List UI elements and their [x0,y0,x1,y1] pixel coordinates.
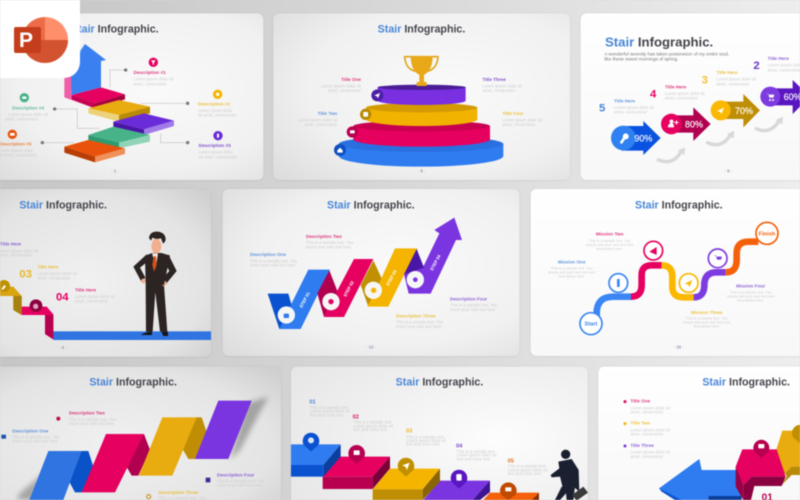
text: description 5: Description #5 [0,142,32,147]
pin 5 [500,482,517,500]
shirt [152,253,158,267]
left arm [133,254,148,282]
step labels: STEP 03 [385,269,398,287]
text: description four: Description Four [450,297,487,302]
icon circle purple [708,249,727,268]
hands [141,279,167,286]
text: mission two: This is a sample text. You [589,239,630,243]
text: item 5: Title Here [614,98,636,103]
text: description 3: Description #3 [199,143,231,148]
finish marker [756,222,778,244]
text: title one: amet, consectetur [630,410,664,415]
yellow block [776,431,800,485]
path orange [726,242,758,272]
arrow 90 [611,121,661,155]
text: item 2 [768,56,800,72]
text: description one: Description One [12,429,49,434]
pink block [736,449,786,500]
bullet one [623,400,626,403]
start marker [580,313,602,335]
text: title two: Lorem ipsum dolor sit [630,427,671,432]
text: step 03: This is a sample text. [406,434,445,439]
icon pink [149,58,158,67]
heading: Stair Infographic. [378,23,465,35]
panel: zigzag band [0,367,281,500]
text: mission two [586,232,633,251]
text: item 4: Lorem ipsum dolor sit [665,91,706,96]
text: step 01: text and more text. [310,412,344,417]
text: title three: Title Three [482,77,506,82]
icon green [20,93,29,102]
step purple [113,113,174,135]
text: description 4: amet, consectetur [5,117,39,122]
start marker: Start [585,322,598,328]
step labels: STEP 02 [342,280,355,298]
text: mission four: description here. [737,298,764,302]
text: description three: insert your own text here [396,324,442,329]
text: item 5: amet, consectetur [614,110,648,115]
heading: Stair Infographic. [702,376,790,388]
text: description 3 [199,143,238,159]
heading: Stair Infographic. [19,199,107,211]
text: title two: amet, consectetur [630,432,664,437]
icon circle pink [644,241,663,260]
text: description four: Description Four [217,472,254,477]
page number: ‹ 5 › [418,169,426,174]
text: mission three: simply add your own text and [683,321,730,325]
text: step 02 [353,414,394,432]
path blue [597,297,631,318]
tier blue [339,136,503,167]
right arm [161,254,177,284]
ribbon step 3 [361,248,417,307]
text: title three: Lorem ipsum dolor sit [630,450,671,455]
text: description one: insert your own text here [250,263,296,268]
text: description 2 [198,101,237,118]
text: item 2: amet, consectetur [768,67,800,72]
step labels: STEP 01 [298,291,311,309]
panel: stair steps with arrow [0,13,263,180]
powerpoint logo card [0,0,80,78]
text: step 05: This is a sample text. [508,464,547,469]
text: description three [159,490,206,500]
text: description one [250,252,298,268]
text: step 03: text and more text. [406,442,440,447]
text: item 4: Title Here [665,84,687,89]
text: description 1: Lorem ipsum dolor sit [134,77,174,82]
text: title three: Lorem ipsum dolor sit [482,84,523,89]
text: description four: This is a sample text. You [450,303,498,308]
text: description one [12,429,60,444]
pin 4 [451,470,467,489]
icon orange [8,130,17,139]
blue arrow [659,459,742,500]
pin 2 [348,445,365,464]
heading: Stair Infographic. [396,376,483,388]
text: title four: amet, consectetur [502,122,536,127]
text: mission four: Mission Four [736,283,765,288]
text: description two: Description Two [306,234,342,239]
page number: ‹ 16 › [674,345,684,350]
text: mission one: simply add your own text and [548,271,595,275]
text: step 02: 02 [353,414,359,420]
icon purple [213,131,223,140]
character: businessman [133,232,177,336]
text: mission one: Mission One [558,259,586,264]
text: title four: Lorem ipsum dolor sit [502,118,543,123]
text: title two [298,111,338,127]
text: item 3: amet, consectetur [716,81,750,86]
text: mission four: This is a sample text. You [730,290,771,294]
text: description two: insert your own text here [306,244,352,249]
page number: ‹ 9 › [724,169,733,174]
text: description two [306,234,354,249]
band purple [195,401,252,459]
number 3: 3 [702,74,708,86]
ribbon step 4 arrow [404,218,462,294]
number 5: 5 [599,103,605,115]
text: mission three: This is a sample text. You [686,317,727,321]
step 3 yellow [373,469,440,500]
body [551,459,579,492]
text: step 04: Lorem ipsum dolor sit [457,453,497,458]
text: step 02: This is a sample text. [353,420,392,425]
text: item 3: Lorem ipsum dolor sit [716,77,757,82]
text: step 05: 05 [508,458,514,464]
text: description two: Description Two [69,411,105,416]
badge pink [30,299,42,312]
arrow up [65,44,106,95]
arrow 80 [661,107,711,141]
text: title one [630,399,671,415]
text: step 04 [456,444,497,461]
text: step 01 [309,400,351,417]
text: step 05: text and more text. [508,471,542,476]
text: mission three: description here. [693,325,720,329]
text: description 5 [0,142,38,158]
icon: trophy [405,56,438,86]
text: item 5 [614,98,655,115]
heading: Stair Infographic. [89,376,177,388]
band shadow left [17,473,43,500]
text: step 05: Lorem ipsum dolor sit [508,467,548,472]
ribbon pink [22,307,53,339]
head [151,239,161,253]
legs [146,285,167,332]
number 04: 04 [56,292,69,304]
connector lines [42,70,188,143]
text: item 2: Title Here [768,56,789,61]
text: mission two: Mission Two [596,232,624,237]
path pink [631,265,662,297]
text: step 05 [508,458,548,476]
text: title one: Lorem ipsum dolor sit [630,405,671,410]
badge purple [371,89,383,101]
text: mission one [548,259,595,279]
ribbon step 1 [268,270,330,329]
text: step 03: Lorem ipsum dolor sit [406,438,447,443]
text: mission three: Mission Three [691,310,723,315]
text: item 4: Lorem ipsum dolor sit [75,294,116,299]
text: description one: Description One [250,252,286,257]
hair [149,232,166,244]
step yellow [88,100,150,122]
text: description three: Description Three [396,314,436,319]
number 03: 03 [19,268,32,280]
badge blue [334,144,346,156]
text: description four [217,472,265,488]
text: description two: This is a sample text. You [69,417,117,422]
text: mission four [727,283,774,302]
band shadow right [230,397,268,460]
badge red [347,126,358,138]
text: item 4 [665,84,706,101]
band yellow [139,417,207,476]
text: title one [321,77,362,93]
step pink [72,87,125,108]
text: mission three [683,310,730,329]
text: step 01: Lorem ipsum dolor sit [310,409,351,414]
tie [152,256,157,272]
path purple [694,272,726,297]
text: title three: amet, consectetur [630,454,664,459]
text: step 02: Lorem ipsum dolor sit [353,423,394,428]
text: mission two: simply add your own text and [586,243,633,247]
band blue [29,451,93,500]
step green [88,127,150,148]
step orange [64,140,125,162]
page number: ‹ 1 › [111,169,119,174]
text: item 4: Title Here [75,287,97,292]
text: title three: amet, consectetur [482,88,516,93]
path yellow [662,265,694,297]
text: step 02: text and more text. [353,427,388,432]
text: item 2 [0,242,39,258]
text: step 03 [406,429,447,447]
text: title four [502,111,543,127]
text: description four: This is a sample text. You [217,478,265,483]
text: title two: amet, consectetur [304,122,338,127]
text: description three [396,314,444,329]
text: title four: Title Four [502,111,524,116]
text: description four: insert your own text here [217,483,263,488]
text: title two: Title Two [318,111,337,116]
legs [555,487,575,500]
head [561,450,570,459]
text: step 01: 01 [309,400,316,406]
badge yellow [0,280,10,292]
icon two [56,417,60,421]
step labels: STEP 04 [429,253,442,271]
text: description 1: Description #1 [134,70,166,75]
text: title one: Lorem ipsum dolor sit [321,84,362,89]
panel: stairs with businessman [0,189,211,357]
step icons [284,277,418,318]
curved arrows [657,120,780,162]
badge yellow [360,109,371,120]
text: item 3: Title Here [37,264,59,269]
heading: Stair Infographic. [71,23,159,35]
text: title one: amet, consectetur [328,88,362,93]
blue floor [53,331,211,340]
band pink [82,434,150,492]
text: title three [630,443,671,459]
subtitle [604,52,729,62]
text: description 2: Description #2 [198,101,230,106]
step 2 pink [323,457,390,489]
text: description 3: Lorem ipsum dolor [199,150,234,155]
subtitle: like these sweet mornings of spring. [604,57,678,62]
text: description 4 [5,105,49,122]
text: title one: Title One [341,77,361,82]
text: item 3: Title Here [716,70,738,75]
curved arrow heads [678,117,783,155]
tier purple [378,85,466,105]
shoes [141,331,168,336]
arrow 60 [760,80,800,114]
bullet two [623,422,626,425]
text: step 03: 03 [406,429,412,435]
text: item 3 [37,264,78,280]
arrow 90: 90% [634,133,652,143]
connector dots [41,68,189,144]
panel: arrows with percentages [581,13,800,180]
text: mission two: description here. [596,247,623,251]
text: item 3 [716,70,757,86]
text: description four [450,297,498,312]
text: description two: insert your own text here [69,421,115,426]
text: title two: Title Two [630,421,650,426]
step 1 blue [291,444,341,477]
text: step 04: This is a sample text. [457,449,496,454]
text: item 4 [75,287,116,303]
panel: winding path start to finish [531,189,800,356]
icon four [206,478,210,482]
pin yellow [792,425,800,443]
heading: Stair Infographic. [605,34,713,49]
text: item 3: Lorem ipsum dolor sit [37,271,78,276]
arrow 80: 80% [685,119,703,129]
icon three [147,495,151,499]
page number: ‹ 13 › [366,345,377,350]
text: description one: This is a sample text. You [12,435,60,440]
heading: Stair Infographic. [327,199,415,211]
text: description 2: sit amet, consectetur [198,113,237,118]
text: step 04: text and more text. [457,456,491,461]
text: mission one: description here. [558,275,585,279]
number 2: 2 [753,60,760,72]
text: mission one: This is a sample text. You [551,267,592,271]
panel: 3d steps with pins [291,367,588,500]
panel: ribbon steps [223,189,519,356]
text: item 2: Title Here [0,242,22,247]
text: description 3: sit amet, consectetur [199,154,238,159]
powerpoint icon: P [19,29,33,52]
text: description 4: Description #4 [12,105,44,110]
arrow 70 [711,94,760,127]
pin 3 [398,458,414,477]
panel: arrow with blocks [598,367,800,500]
text: step 04: 04 [456,444,463,450]
ribbon step 2 [317,259,373,317]
number 4: 4 [650,89,657,101]
text: description 2: Lorem ipsum dolor [198,108,233,113]
subtitle: A wonderful serenity has taken possession of my entire soul, [604,52,729,57]
text: description four: insert your own text here [450,307,496,312]
arrow 70: 70% [735,106,753,116]
text: item 3: amet, consectetur [37,275,71,280]
text: title three: Title Three [630,443,654,448]
page number: ‹ 4 › [59,345,67,350]
pin pink [753,440,769,458]
text: description 4: Lorem ipsum dolor sit [8,112,49,117]
text: description one: insert your own text here [12,439,59,444]
bullet three [623,444,626,447]
icon circle yellow [679,274,698,292]
icon circle blue [609,274,628,292]
finish marker: Finish [759,231,776,237]
text: description one: This is a sample text. You [250,258,298,263]
text: title two [630,421,671,437]
text: description two [69,411,117,426]
step 4 purple [423,481,490,500]
step labels [298,253,442,309]
text: title one: Title One [630,399,651,404]
step circles [278,271,424,324]
text: item 5: Lorem ipsum dolor sit [614,105,655,110]
character: walking businessman [551,450,588,500]
jacket [145,253,170,285]
icon one [1,435,6,439]
text: item 4: amet, consectetur [665,96,699,101]
icon yellow [213,90,222,99]
text: description 1 [134,70,174,86]
text: description two: This is a sample text. You [306,240,354,245]
text: mission four: simply add your own text and [727,294,774,298]
pin 1 [303,433,319,452]
text: title two: Lorem ipsum dolor sit [298,118,338,123]
briefcase [572,487,588,500]
text: description three: Description Three [159,490,199,495]
text: description 1: amet, consectetur [134,81,167,86]
text: title three [482,77,523,93]
text: step 01: This is a sample text. [310,405,349,410]
arrow side [64,68,95,108]
text: description three: This is a sample text. You [396,320,444,325]
text: item 4: amet, consectetur [75,298,109,303]
tier red [353,121,490,147]
panel: tiered podium with trophy [273,13,570,180]
ribbon yellow [0,287,22,315]
step 5 orange [483,493,539,500]
tier yellow [366,103,477,126]
heading: Stair Infographic. [635,199,723,211]
